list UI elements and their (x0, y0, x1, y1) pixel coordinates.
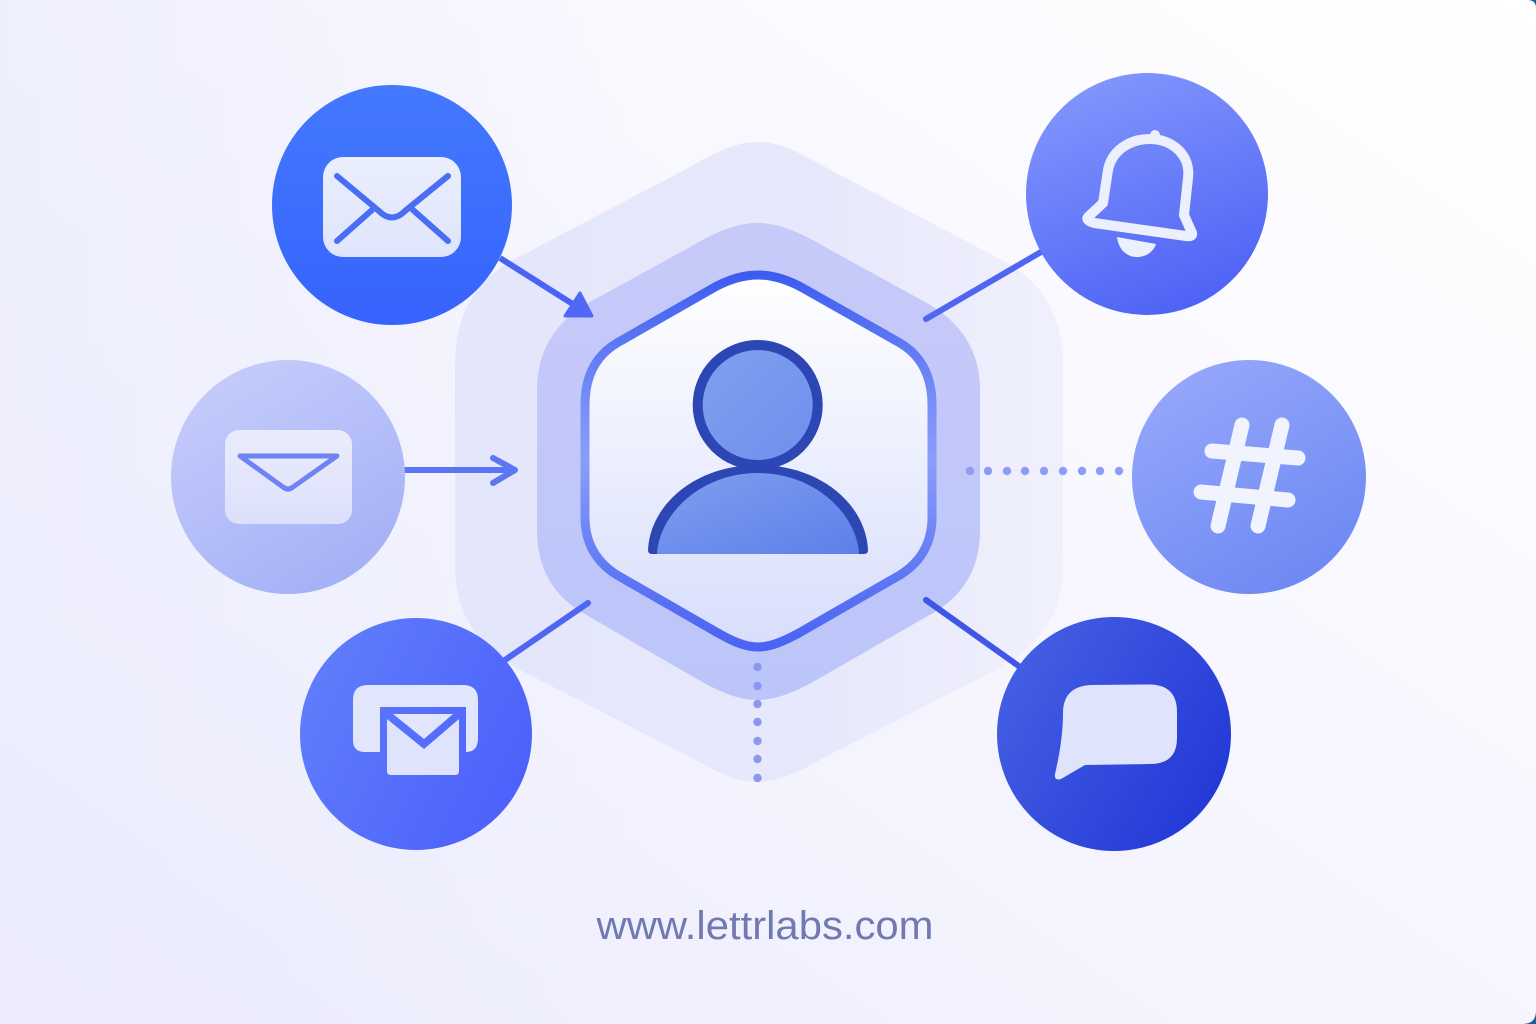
icon: stacked mail (353, 685, 478, 775)
icon: speech bubble (1055, 684, 1177, 779)
connector: hashtag dotted (966, 467, 1123, 475)
icon: hash (1201, 425, 1298, 526)
node: bell (1026, 73, 1268, 315)
node: email (272, 85, 512, 325)
icon: person (648, 345, 868, 554)
node: chat (997, 617, 1231, 851)
arrow: letter to center (405, 458, 515, 483)
node: letter (171, 360, 405, 594)
inner hexagon (585, 275, 932, 647)
icon: envelope light (225, 430, 352, 524)
connector: bell (926, 252, 1041, 319)
arrow: email to center (500, 258, 592, 316)
outer hexagon (455, 142, 1063, 782)
icon: bell (1087, 130, 1192, 257)
connector: mail stack (505, 603, 588, 660)
website url: www.lettrlabs.com (595, 904, 934, 948)
node: mail stack (300, 618, 532, 850)
connector: bottom dotted (753, 663, 762, 782)
icon: envelope (323, 157, 461, 257)
connector: chat (926, 600, 1020, 667)
middle hexagon (537, 223, 980, 700)
node: hashtag (1132, 360, 1366, 594)
